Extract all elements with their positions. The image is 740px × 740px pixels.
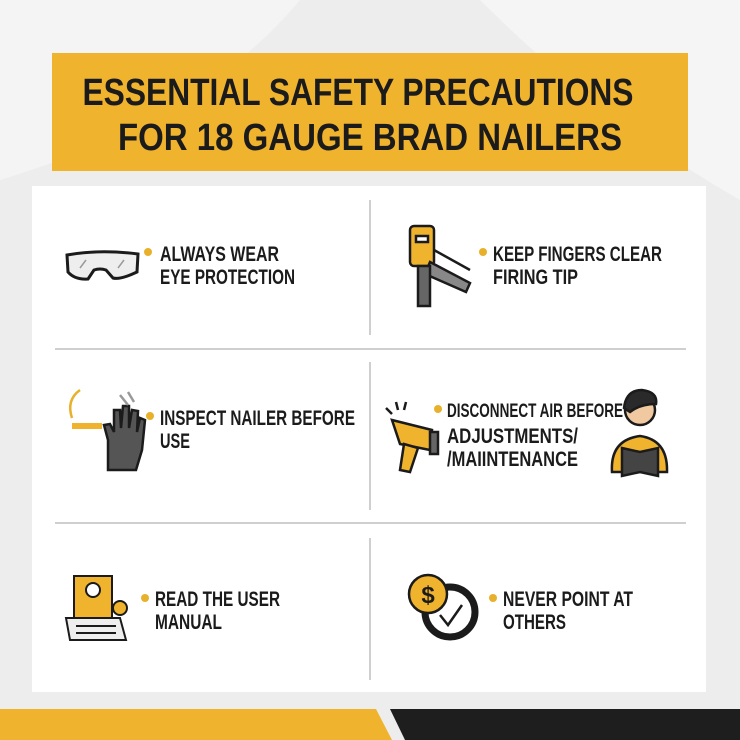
cell: read manual: MANUAL <box>155 611 222 634</box>
cell: fingers clear: FIRING TIP <box>493 266 578 289</box>
title banner: FOR 18 GAUGE BRAD NAILERS <box>118 117 622 159</box>
cell: eye protection: ALWAYS WEAR <box>160 243 279 266</box>
bottom stripes <box>0 709 740 740</box>
cell: fingers clear: KEEP FINGERS CLEAR <box>493 243 662 266</box>
cell: eye protection <box>67 243 295 289</box>
icon: nail gun <box>386 402 438 472</box>
cell: disconnect air: DISCONNECT AIR BEFORE <box>447 401 623 422</box>
cell: disconnect air: ADJUSTMENTS/ <box>447 425 578 448</box>
icon: manual <box>66 576 127 640</box>
title banner: ESSENTIAL SAFETY PRECAUTIONS <box>82 72 634 114</box>
cell: never point: OTHERS <box>503 611 566 634</box>
cell: inspect: USE <box>160 430 190 453</box>
cell: disconnect air: /MAIINTENANCE <box>447 448 578 471</box>
cell: eye protection: EYE PROTECTION <box>160 266 295 289</box>
title banner <box>52 53 688 171</box>
cell: disconnect air <box>386 390 667 476</box>
icon: coin and gauge: $ <box>421 582 435 609</box>
icon: coin and gauge <box>409 575 475 637</box>
cell: read manual: READ THE USER <box>155 588 280 611</box>
icon: glove <box>70 390 145 470</box>
icon: goggles <box>67 252 138 279</box>
cell: read manual <box>66 576 280 640</box>
cell: inspect: INSPECT NAILER BEFORE <box>160 407 355 430</box>
cell: inspect <box>70 390 355 470</box>
cell: never point <box>409 575 633 637</box>
main panel <box>32 186 706 692</box>
icon: nailer <box>410 226 470 306</box>
cell: never point: NEVER POINT AT <box>503 588 633 611</box>
icon: person reading <box>612 390 667 476</box>
cell: fingers clear <box>410 226 662 306</box>
